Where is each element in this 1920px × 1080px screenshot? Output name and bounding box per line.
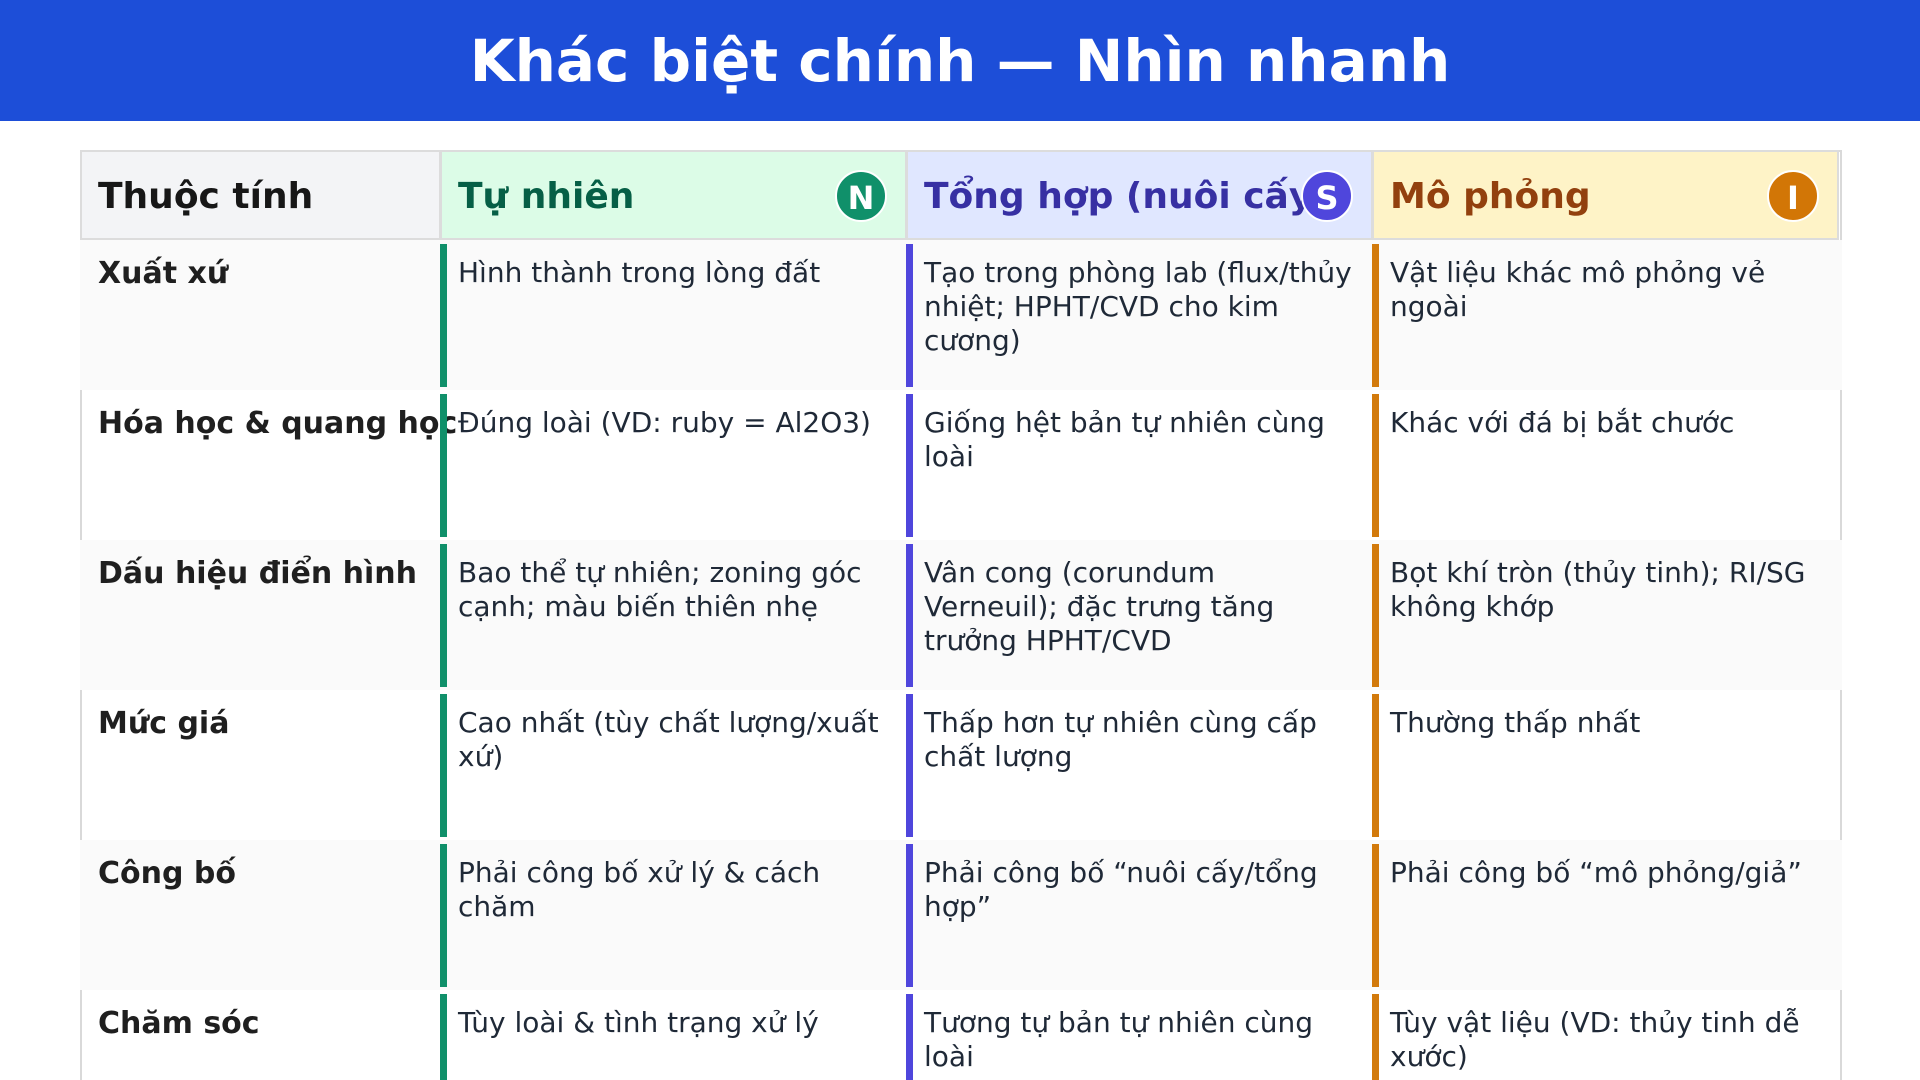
synthetic: care: Tương tự bản tự nhiên cùng (924, 1006, 1313, 1039)
label: price: Mức giá (98, 706, 229, 741)
green stripes (440, 244, 447, 1080)
synthetic: signs: Vân cong (corundum (924, 556, 1215, 589)
row: care (80, 990, 1842, 1080)
synthetic: price: Thấp hơn tự nhiên cùng cấp (924, 706, 1317, 739)
synthetic: chemistry: loài (924, 440, 974, 473)
imitation: price: Thường thấp nhất (1390, 706, 1640, 739)
title banner (0, 0, 1920, 121)
badge: I (1767, 170, 1819, 222)
row: chemistry and optics (80, 390, 1842, 540)
natural: signs (458, 556, 862, 623)
imitation: origin (1390, 256, 1765, 323)
synthetic: origin: cương) (924, 324, 1021, 357)
imitation: origin: Vật liệu khác mô phỏng vẻ (1390, 256, 1765, 289)
natural: disclosure: Phải công bố xử lý & cách (458, 856, 820, 889)
synthetic: care (924, 1006, 1313, 1073)
imitation: disclosure: Phải công bố “mô phỏng/giả” (1390, 856, 1802, 889)
column header: attribute: Thuộc tính (98, 176, 313, 217)
synthetic: origin: Tạo trong phòng lab (flux/thủy (924, 256, 1352, 289)
synthetic: disclosure: Phải công bố “nuôi cấy/tổng (924, 856, 1318, 889)
natural: chemistry: Đúng loài (VD: ruby = Al2O3) (458, 406, 871, 439)
natural: price (458, 706, 879, 773)
badge: S (1301, 170, 1353, 222)
synthetic: chemistry (924, 406, 1325, 473)
row: disclosure (80, 840, 1842, 990)
synthetic: origin (924, 256, 1352, 357)
badge: N: N (848, 179, 874, 217)
row: price level (80, 690, 1842, 840)
synthetic: signs: trưởng HPHT/CVD (924, 624, 1172, 657)
label: chemistry: Hóa học & quang học (98, 406, 457, 441)
natural: care: Tùy loài & tình trạng xử lý (458, 1006, 819, 1039)
imitation: care: xước) (1390, 1040, 1468, 1073)
label: origin: Xuất xứ (98, 256, 228, 291)
column header: synthetic (906, 150, 1373, 240)
amber stripes (1372, 244, 1379, 1080)
indigo stripes (906, 244, 913, 1080)
imitation: care (1390, 1006, 1800, 1073)
synthetic: disclosure (924, 856, 1318, 923)
column header: imitation (1372, 150, 1839, 240)
imitation: origin: ngoài (1390, 290, 1468, 323)
synthetic: origin: nhiệt; HPHT/CVD cho kim (924, 290, 1279, 323)
imitation: care: Tùy vật liệu (VD: thủy tinh dễ (1390, 1006, 1800, 1039)
imitation: signs: không khớp (1390, 590, 1554, 623)
title banner: Khác biệt chính — Nhìn nhanh (470, 27, 1450, 95)
label: disclosure: Công bố (98, 856, 236, 891)
natural: origin: Hình thành trong lòng đất (458, 256, 820, 289)
natural: price: Cao nhất (tùy chất lượng/xuất (458, 706, 879, 739)
column header: imitation: Mô phỏng (1390, 176, 1591, 217)
column header: synthetic: Tổng hợp (nuôi cấy) (924, 176, 1329, 217)
synthetic: signs (924, 556, 1274, 657)
natural: signs: Bao thể tự nhiên; zoning góc (458, 556, 862, 589)
badge: N (835, 170, 887, 222)
badge: I: I (1787, 179, 1799, 217)
label: care: Chăm sóc (98, 1006, 260, 1041)
row: origin (80, 240, 1842, 390)
synthetic: price (924, 706, 1317, 773)
synthetic: signs: Verneuil); đặc trưng tăng (924, 590, 1274, 623)
natural: disclosure (458, 856, 820, 923)
label: signs: Dấu hiệu điển hình (98, 556, 417, 591)
badge: S: S (1315, 179, 1339, 217)
natural: disclosure: chăm (458, 890, 536, 923)
column header: natural (440, 150, 907, 240)
column header: natural: Tự nhiên (458, 176, 634, 217)
natural: signs: cạnh; màu biến thiên nhẹ (458, 590, 818, 623)
imitation: chemistry: Khác với đá bị bắt chước (1390, 406, 1734, 439)
synthetic: disclosure: hợp” (924, 890, 991, 923)
synthetic: care: loài (924, 1040, 974, 1073)
imitation: signs: Bọt khí tròn (thủy tinh); RI/SG (1390, 556, 1806, 589)
natural: price: xứ) (458, 740, 503, 773)
synthetic: price: chất lượng (924, 740, 1072, 773)
table outer border (80, 150, 1842, 1080)
row: typical signs (80, 540, 1842, 690)
column header: attribute (80, 150, 441, 240)
imitation: signs (1390, 556, 1806, 623)
synthetic: chemistry: Giống hệt bản tự nhiên cùng (924, 406, 1325, 439)
